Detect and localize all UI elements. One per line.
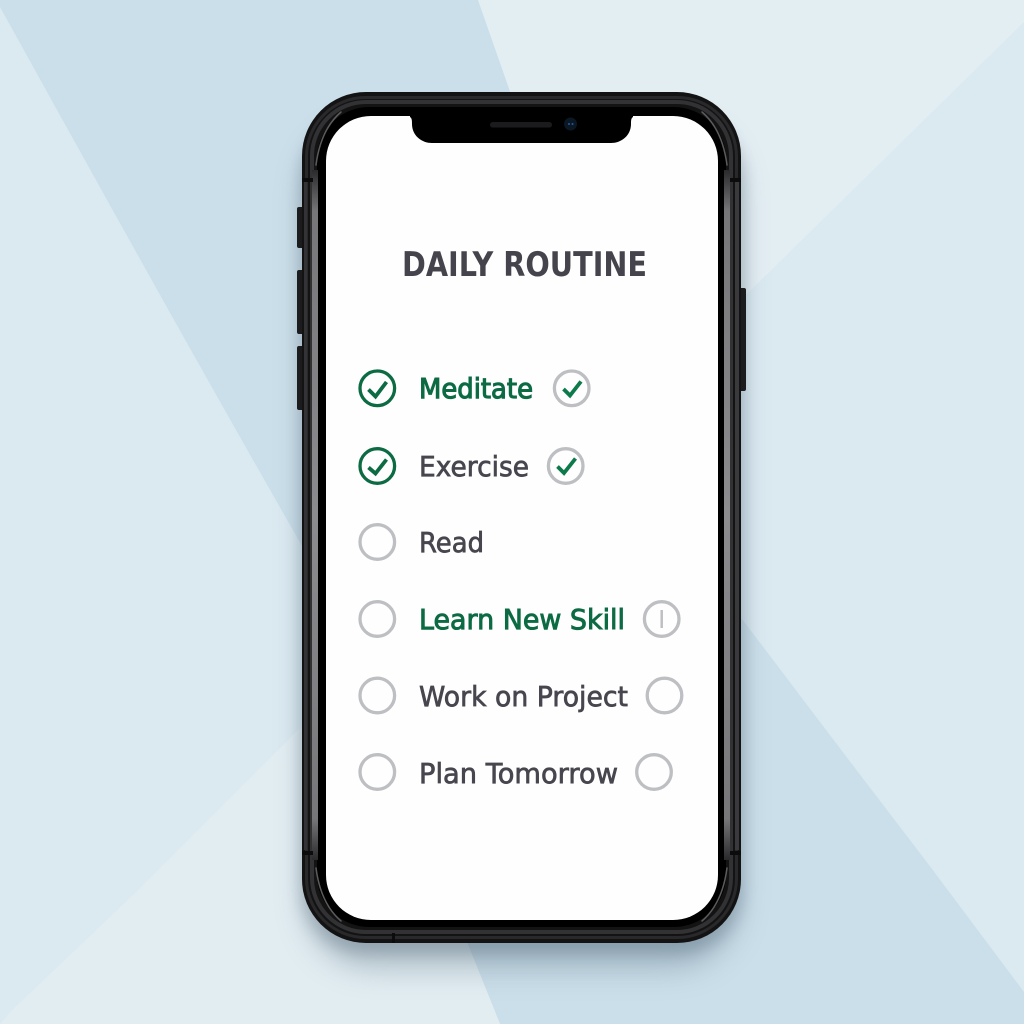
label: Work on Project — [419, 681, 628, 713]
label: Exercise — [419, 451, 529, 483]
antenna seams — [302, 178, 741, 943]
metal rim highlights — [312, 170, 318, 860]
task: Learn New Skill — [360, 602, 679, 636]
camera — [564, 118, 577, 130]
phone — [297, 92, 746, 943]
title: DAILY ROUTINE — [402, 245, 647, 285]
screen — [326, 116, 718, 920]
icon: trailing check — [548, 449, 583, 483]
label: Meditate — [419, 373, 533, 405]
icon: empty circle — [360, 755, 395, 789]
phone frame — [302, 92, 741, 943]
task: Work on Project — [360, 678, 682, 713]
task: Plan Tomorrow — [360, 755, 671, 790]
notch — [410, 114, 633, 143]
icon: trailing circle with bar — [644, 602, 679, 636]
task: Exercise — [360, 449, 583, 483]
side buttons — [297, 207, 746, 410]
speaker — [490, 122, 552, 128]
phone shadow — [300, 112, 744, 967]
icon: empty circle — [360, 602, 395, 636]
icon: empty circle — [360, 678, 395, 713]
task: Meditate — [360, 371, 589, 406]
icon: checked circle — [360, 371, 395, 406]
icon: checked circle — [360, 449, 395, 483]
icon: empty circle — [360, 525, 395, 559]
task: Read — [360, 525, 484, 559]
label: Learn New Skill — [419, 604, 625, 636]
label: Read — [419, 527, 484, 559]
icon: trailing check — [554, 371, 589, 406]
label: Plan Tomorrow — [419, 758, 618, 790]
icon: trailing circle — [647, 678, 682, 713]
icon: trailing circle — [637, 755, 671, 789]
